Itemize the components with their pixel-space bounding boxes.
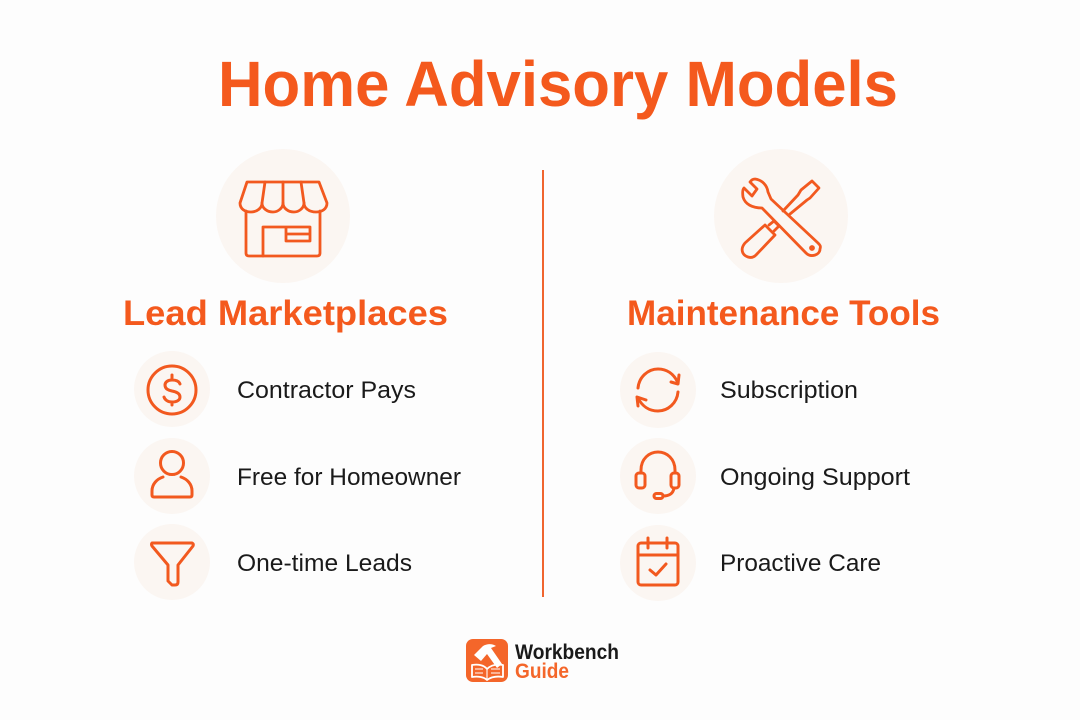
- icon: refresh arrows: [620, 352, 696, 428]
- wordmark: [515, 641, 619, 683]
- label: Contractor Pays: [237, 377, 416, 404]
- title: Home Advisory Models: [218, 48, 898, 120]
- label: One-time Leads: [237, 550, 412, 577]
- item: contractor pays: [134, 351, 416, 427]
- item: subscription: [620, 352, 858, 428]
- icon: storefront: [216, 149, 350, 283]
- icon: funnel: [134, 524, 210, 600]
- label: Proactive Care: [720, 550, 881, 577]
- label: Subscription: [720, 377, 858, 404]
- icon: headset: [620, 438, 696, 514]
- label: Free for Homeowner: [237, 464, 461, 491]
- icon: calendar check: [620, 525, 696, 601]
- item: ongoing support: [620, 438, 910, 514]
- center divider: [542, 170, 544, 597]
- label: Ongoing Support: [720, 464, 910, 491]
- heading: lead marketplaces: Lead Marketplaces: [123, 294, 448, 333]
- panel: maintenance tools: [620, 149, 940, 601]
- item: one-time leads: [134, 524, 412, 600]
- icon: dollar coin: [134, 351, 210, 427]
- logo: workbench guide: [466, 639, 619, 683]
- heading: maintenance tools: Maintenance Tools: [627, 294, 940, 333]
- item: proactive care: [620, 525, 881, 601]
- panel: lead marketplaces: [123, 149, 461, 600]
- wordmark: Workbench: [515, 641, 619, 664]
- wordmark: Guide: [515, 660, 569, 683]
- icon: wrench and screwdriver: [714, 149, 848, 283]
- item: free for homeowner: [134, 438, 461, 514]
- icon: person: [134, 438, 210, 514]
- icon: hammer and book: [466, 639, 508, 682]
